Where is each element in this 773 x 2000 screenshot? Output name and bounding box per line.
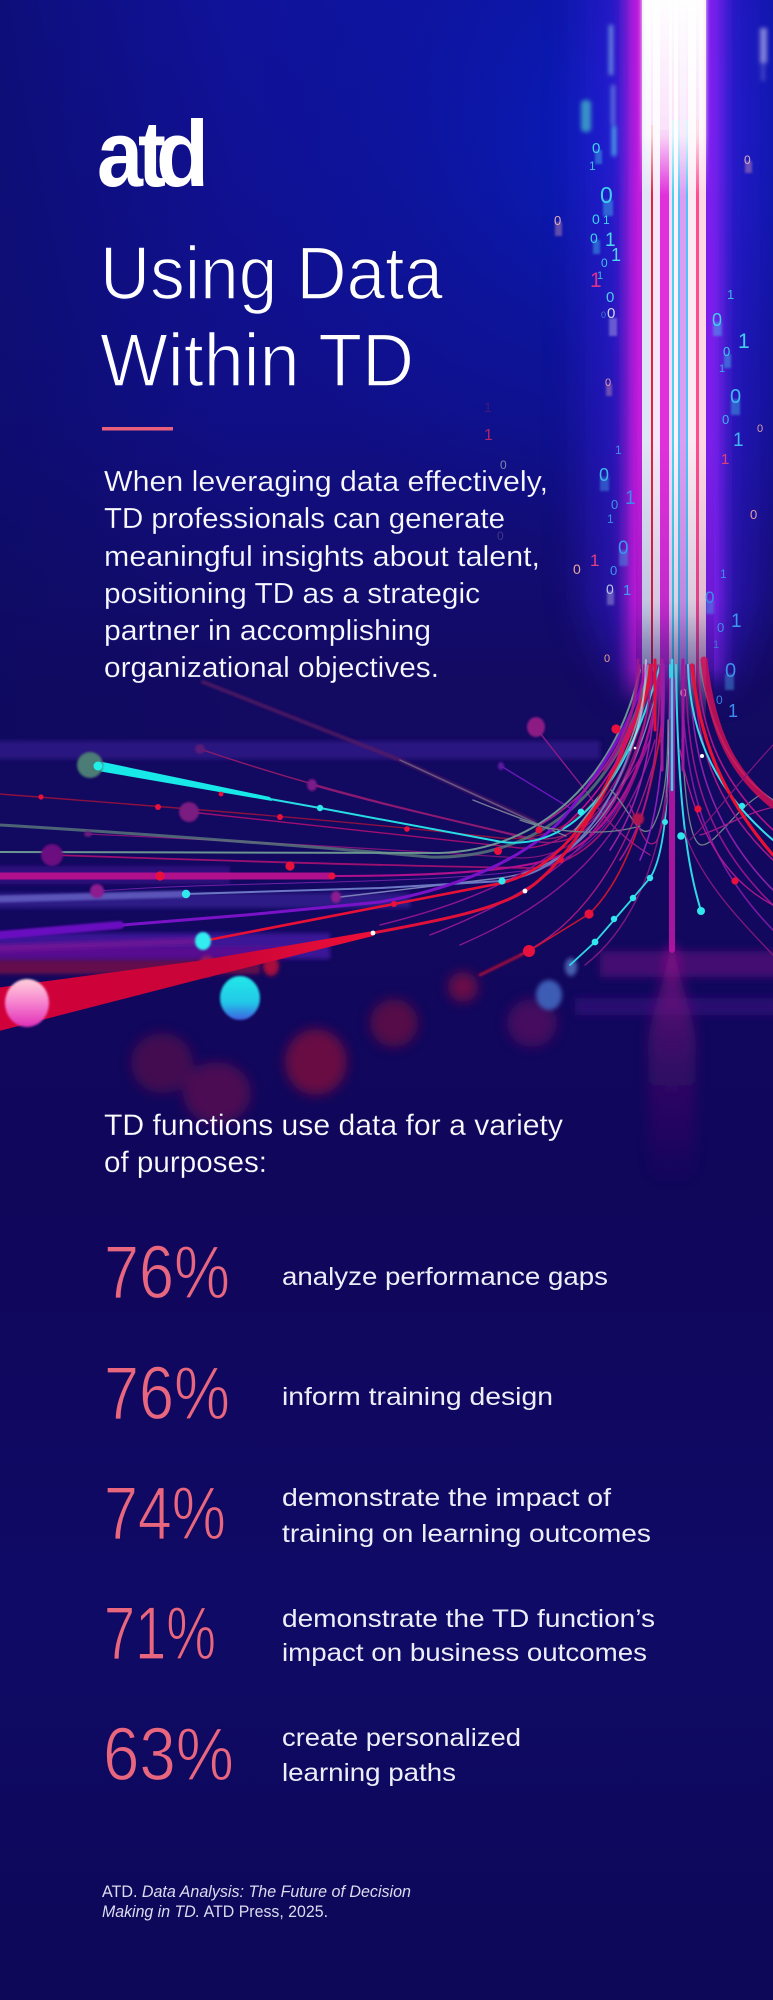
lower red fibre: [529, 700, 664, 951]
binary digits: 1: [590, 551, 599, 570]
streaks of blurred digits near the top: [581, 25, 767, 156]
blurred bokeh circles: [131, 972, 557, 1124]
binary digits: 0: [618, 538, 629, 559]
white nodes: [371, 747, 704, 935]
stat: 63% personalized learning paths: create personalized: [282, 1724, 521, 1752]
statistics list: [103, 1230, 655, 1796]
intro paragraph: [104, 466, 548, 684]
central vertical magenta: [669, 680, 675, 950]
binary digits: 1: [603, 213, 610, 227]
violet fibre: [0, 665, 648, 935]
digit reflections: [555, 150, 752, 690]
binary digits: 0: [750, 507, 757, 522]
binary digits: 1: [727, 287, 734, 302]
stat: 76% inform training design: 76%: [104, 1351, 230, 1435]
intro paragraph: When leveraging data effectively,: [104, 466, 548, 498]
binary digits: 0: [592, 211, 600, 227]
binary digits: 1: [728, 701, 738, 721]
binary digits: 1: [738, 330, 750, 353]
binary digits: 1: [484, 399, 492, 415]
glowing balls: [5, 932, 260, 1027]
binary digits: 0: [606, 289, 614, 306]
binary digits: 0: [554, 213, 561, 228]
binary digits: 0: [744, 153, 751, 167]
blue-grey fibre: [0, 894, 186, 899]
binary digits: 1: [590, 269, 602, 292]
logo: atd: t: [138, 101, 166, 206]
binary digits: 0: [730, 386, 741, 408]
stat: 71% impact on business outcomes: 71%: [104, 1591, 216, 1675]
stat: 76% analyze performance gaps: analyze performance gaps: [282, 1263, 608, 1291]
binary digits: 0: [601, 256, 608, 270]
bright cyan fibre: [98, 761, 272, 801]
binary digits: 0: [757, 423, 763, 435]
subheading: TD functions use data for a variety: [104, 1109, 563, 1142]
logo: atd: [97, 101, 209, 206]
binary digits: 0: [680, 686, 687, 700]
thick magenta fibre: [0, 872, 330, 880]
red fibre 1: [203, 665, 650, 941]
binary digits: 0: [592, 140, 600, 157]
intro paragraph: TD professionals can generate: [104, 503, 505, 535]
binary digits: [484, 25, 767, 721]
source citation: Making in TD. ATD Press, 2025.: [102, 1902, 328, 1921]
stat: 76% analyze performance gaps: [104, 1230, 608, 1314]
binary digits: 0: [605, 377, 611, 389]
fibre lines: [0, 660, 773, 1032]
binary digits: 0: [599, 465, 609, 485]
magenta and red thin fan, left: [0, 665, 668, 965]
title: [100, 231, 443, 402]
binary digits: 1: [733, 430, 744, 451]
subheading: of purposes:: [104, 1146, 267, 1179]
stat: 63% personalized learning paths: learning paths: [282, 1759, 456, 1787]
binary digits: 0: [705, 588, 714, 607]
U-shaped dips: [520, 720, 770, 845]
binary digits: 0: [723, 344, 730, 359]
stat: 74% impact on learning outcomes: 74%: [104, 1471, 226, 1555]
grey-green fibres: [0, 670, 648, 857]
binary digits: 0: [497, 529, 504, 543]
binary digits: 1: [615, 443, 622, 457]
binary digits: 1: [484, 427, 493, 444]
intro paragraph: partner in accomplishing: [104, 615, 431, 647]
sharp and soft nodes on the fibres: [5, 717, 745, 1027]
dense fan above spread: [540, 665, 773, 930]
stat: 74% impact on learning outcomes: training on learning outcomes: [282, 1520, 651, 1548]
binary digits: 0: [717, 620, 724, 635]
accent rule: [102, 427, 173, 430]
binary digits: 0: [607, 305, 615, 322]
intro paragraph: positioning TD as a strategic: [104, 578, 480, 610]
red nodes: [38, 724, 739, 957]
binary digits: 1: [625, 488, 636, 509]
binary digits: 1: [605, 230, 616, 251]
logo: atd: a: [97, 101, 144, 206]
binary digits: 0: [500, 458, 507, 472]
binary digits: 0: [610, 563, 617, 578]
binary digits: 1: [623, 582, 631, 599]
source citation: ATD. Data Analysis: The Future of Decision: [102, 1882, 411, 1901]
binary digits: 0: [600, 182, 613, 208]
binary digits: 1: [721, 451, 729, 468]
lower cyan fibre: [570, 665, 670, 965]
bottom glow column: [648, 946, 696, 1185]
stat: 63% personalized learning paths: 63%: [103, 1712, 234, 1796]
logo: atd: d: [156, 101, 209, 206]
binary digits: 0: [611, 497, 618, 512]
stat: 76% analyze performance gaps: 76%: [104, 1230, 230, 1314]
binary digits: 1: [597, 270, 603, 282]
source citation: [102, 1882, 411, 1921]
beam of light: [585, 0, 760, 732]
intro paragraph: organizational objectives.: [104, 652, 439, 684]
binary digits: 0: [601, 310, 606, 320]
binary digits: 0: [573, 561, 581, 577]
red tapered band: [0, 931, 373, 1032]
binary digits: 0: [725, 660, 736, 682]
title: Using Data: [100, 231, 443, 315]
stat: 76% inform training design: [104, 1351, 553, 1435]
mid-distance blurred nodes: [199, 956, 577, 1010]
binary digits: 1: [719, 363, 725, 375]
long faint line from top: [203, 682, 535, 822]
binary digits: 1: [731, 611, 742, 632]
binary digits: 0: [590, 230, 598, 246]
binary digits: 1: [611, 245, 621, 265]
light bands behind the fibres: [0, 741, 600, 974]
stat: 71% impact on business outcomes: impact on business outcomes: [282, 1639, 647, 1667]
title: Within TD: [100, 318, 414, 402]
stat: 76% inform training design: inform training design: [282, 1383, 553, 1411]
subheading: [104, 1109, 563, 1179]
beam-lower strands: [605, 660, 638, 770]
binary digits: 0: [606, 581, 614, 597]
right light bands: [575, 951, 773, 1015]
stat: 63% personalized learning paths: [103, 1712, 521, 1796]
thick outer fibres: [704, 660, 773, 805]
binary digits: 1: [713, 639, 719, 651]
stat: 71% impact on business outcomes: demonstrate the TD function’s: [282, 1605, 655, 1633]
binary digits: 0: [722, 412, 729, 427]
stat: 74% impact on learning outcomes: demonstrate the impact of: [282, 1484, 611, 1512]
binary digits: 0: [604, 653, 610, 665]
binary digits: 0: [712, 310, 722, 330]
binary digits: 0: [716, 693, 723, 707]
binary digits: 1: [720, 567, 727, 581]
binary digits: 1: [589, 159, 596, 173]
cyan nodes: [182, 803, 745, 945]
binary digits: 1: [607, 512, 614, 526]
large blurred nodes: [41, 717, 644, 903]
stat: 71% impact on business outcomes: [104, 1591, 655, 1675]
intro paragraph: meaningful insights about talent,: [104, 541, 540, 573]
stat: 74% impact on learning outcomes: [104, 1471, 651, 1555]
